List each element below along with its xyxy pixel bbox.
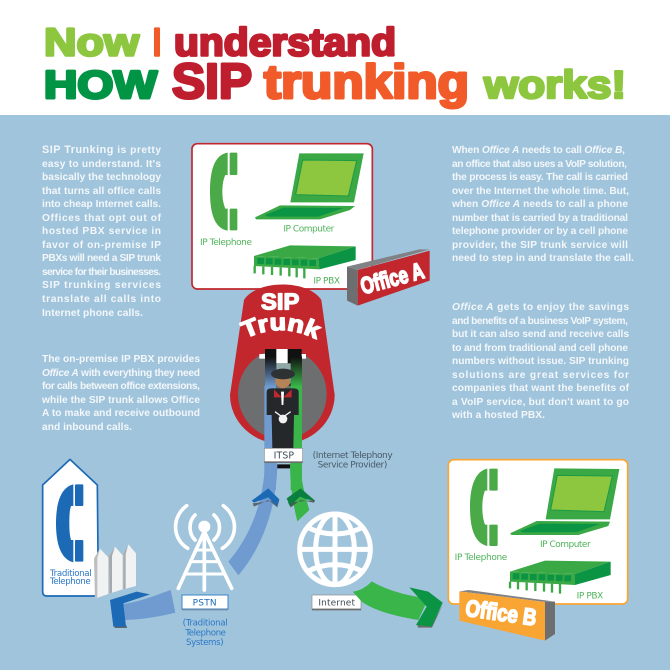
text block: SIP trunking intro: SIP trunking services — [42, 280, 161, 291]
text block: SIP trunking intro: translate all calls into — [42, 294, 161, 305]
icon: IP PBX — [510, 561, 611, 594]
label: Traditional Telephone Systems: Systems) — [186, 638, 224, 648]
sign: Office B: Office B — [464, 595, 538, 631]
panel: Office B — [448, 460, 628, 604]
label: IP PBX: IP PBX — [577, 592, 603, 602]
text block: SIP trunking intro — [42, 144, 162, 319]
label: Internet Telephony Service Provider: Service Provider) — [318, 461, 387, 471]
traditional telephony side — [43, 459, 279, 648]
icon: IP computer — [255, 153, 364, 219]
icon: PSTN tower — [176, 506, 234, 590]
text block: SIP trunking intro: SIP Trunking is pretty — [42, 144, 161, 156]
text block: on-premise IP PBX: The on-premise IP PBX provides — [42, 354, 200, 365]
icon: internet globe — [299, 514, 371, 585]
sign: Office A — [347, 249, 430, 306]
label: Internet Telephony Service Provider: (Internet Telephony — [313, 451, 393, 461]
text block: calling Office B: provider, the SIP trunk service will — [452, 240, 628, 251]
label: Traditional Telephone: Traditional — [49, 569, 92, 579]
text block: SIP trunking intro: favor of on-premise IP — [42, 240, 161, 251]
fence pickets — [94, 544, 136, 599]
title: understand — [174, 22, 396, 64]
SIP trunk cylinder — [230, 284, 393, 490]
icon: traditional telephone — [56, 484, 83, 562]
title: SIP — [172, 55, 252, 109]
text block: calling Office B: an office that also uses a VoIP solution, — [452, 159, 627, 170]
title: Now — [44, 22, 140, 64]
label: Traditional Telephone Systems: Telephone — [184, 628, 226, 638]
text block: benefits: with a hosted PBX. — [451, 410, 545, 421]
panel: Office A — [192, 144, 372, 289]
arrow: blue from trunk to PSTN — [228, 463, 279, 575]
label: Internet: Internet — [318, 598, 355, 608]
text block: calling Office B: over the Internet the whole time. But, — [452, 186, 629, 197]
text block: on-premise IP PBX: Office A with everything they need — [42, 368, 200, 379]
text block: benefits: solutions are great services for — [452, 370, 629, 381]
label: Traditional Telephone Systems: (Traditional — [183, 618, 228, 628]
text block: calling Office B: telephone provider or by a cell phone — [452, 226, 628, 237]
text block: benefits: Office A gets to enjoy the savings — [452, 302, 629, 313]
label: Internet Telephony Service Provider — [313, 451, 393, 471]
icon: IP telephone — [210, 153, 237, 231]
text block: SIP trunking intro: Internet phone calls. — [42, 308, 143, 319]
text block: calling Office B: number that is carried by a traditional — [452, 213, 628, 224]
label: Traditional Telephone Systems — [183, 618, 228, 648]
title: trunking — [264, 55, 469, 108]
icon: IP PBX — [254, 245, 356, 278]
label: PSTN: PSTN — [193, 598, 217, 608]
text block: benefits: but it can also send and receive calls — [452, 329, 629, 340]
text block: calling Office B: need to step in and translate the call. — [452, 253, 634, 264]
label: Traditional Telephone — [49, 569, 92, 587]
label: Traditional Telephone: Telephone — [49, 577, 91, 587]
text block: benefits: companies that want the benefits of — [452, 383, 630, 394]
text block: SIP trunking intro: service for their businesses. — [42, 267, 161, 278]
text block: benefits: numbers without issue. SIP trunking — [452, 356, 629, 367]
arrow: green from internet to Office B — [353, 581, 443, 628]
text block: calling Office B: the process is easy. The call is carried — [452, 172, 628, 183]
text block: SIP trunking intro: PBXs will need a SIP trunk — [42, 253, 161, 264]
label: ITSP: ITSP — [274, 450, 294, 461]
arrow: green from trunk to internet — [287, 463, 315, 521]
text block: SIP trunking intro: Offices that opt out of — [42, 213, 162, 224]
text block: benefits — [451, 302, 630, 421]
ITSP attendant figure — [267, 369, 299, 468]
text block: benefits: and benefits of a business VoIP system, — [452, 316, 628, 327]
text block: SIP trunking intro: easy to understand. It's — [42, 159, 161, 170]
text block: on-premise IP PBX: and inbound calls. — [42, 422, 132, 433]
label: PSTN — [182, 595, 228, 610]
text block: calling Office B: When Office A needs to call Office B, — [452, 145, 625, 156]
label: IP Computer: IP Computer — [540, 540, 591, 550]
title: I — [153, 22, 161, 64]
text block: SIP trunking intro: basically the technology — [42, 172, 161, 183]
label: ITSP — [264, 448, 303, 463]
arrow: blue from PSTN to telephone — [110, 590, 175, 628]
title: works! — [483, 64, 626, 107]
label: IP Computer: IP Computer — [283, 225, 335, 235]
text block: benefits: a VoIP service, but don't want to go — [452, 397, 629, 408]
label: SIP Trunk: SIP — [261, 288, 299, 314]
title — [44, 22, 626, 109]
icon: IP telephone — [470, 469, 498, 546]
text block: on-premise IP PBX: while the SIP trunk allows Office — [41, 395, 200, 406]
text block: on-premise IP PBX — [41, 354, 200, 433]
label: IP Telephone: IP Telephone — [455, 553, 508, 563]
label: SIP Trunk: Trunk — [238, 316, 322, 340]
text block: benefits: to and from traditional and cell phone — [452, 343, 628, 354]
title: HOW — [44, 64, 157, 107]
internet side and Office B — [287, 460, 628, 641]
sign: Office A: Office A — [358, 257, 427, 299]
icon: IP computer — [510, 468, 619, 535]
label: IP Telephone: IP Telephone — [200, 238, 252, 248]
text block: SIP trunking intro: into cheap Internet calls. — [42, 199, 161, 210]
label: SIP Trunk — [238, 288, 322, 340]
arrow strips: blue and green leaving the trunk — [264, 386, 302, 490]
text block: on-premise IP PBX: A to make and receive outbound — [42, 408, 200, 419]
text block: SIP trunking intro: hosted PBX service in — [42, 226, 161, 237]
label: IP PBX: IP PBX — [313, 277, 340, 287]
text block: SIP trunking intro: that turns all office calls — [42, 186, 161, 197]
text block: calling Office B — [451, 145, 634, 264]
panel: traditional telephone tag — [43, 459, 98, 596]
text block: on-premise IP PBX: for calls between office extensions, — [42, 381, 200, 392]
label: Internet — [312, 595, 361, 610]
text block: calling Office B: when Office A needs to call a phone — [451, 199, 628, 210]
